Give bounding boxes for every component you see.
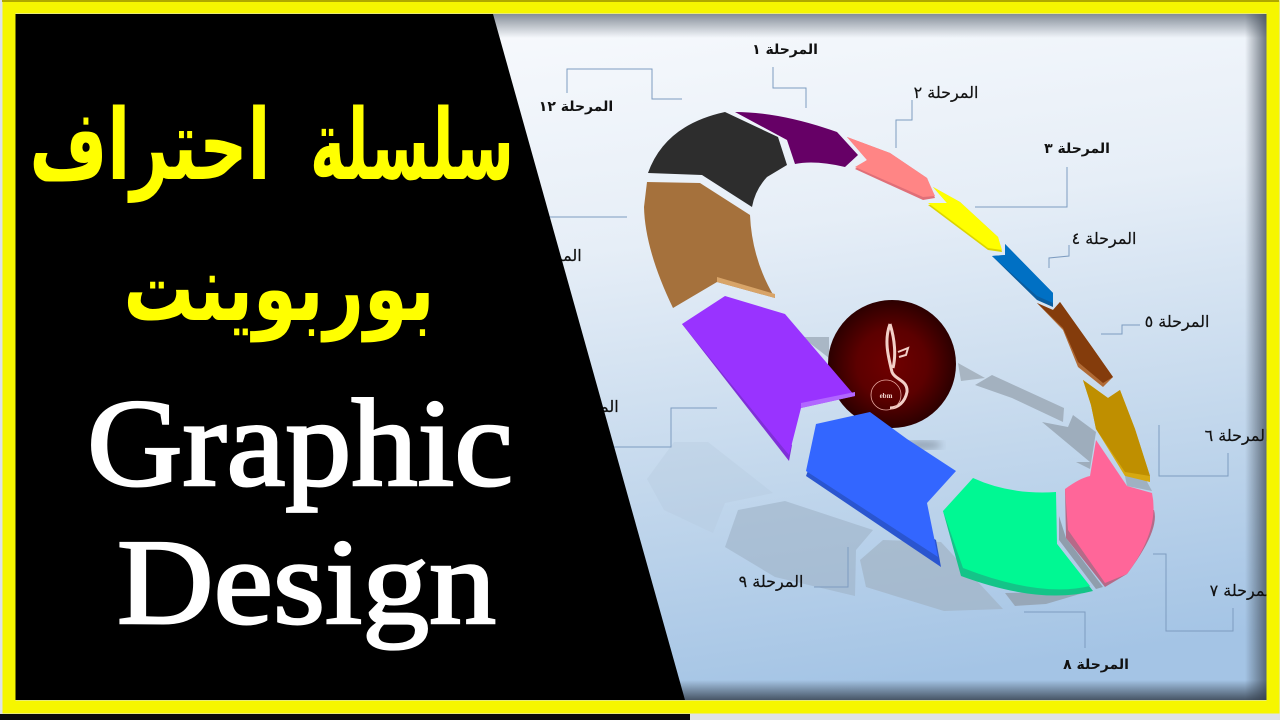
segment 6: gold [1083, 380, 1150, 482]
stage labels: المرحلة ١٢ [539, 99, 613, 115]
stage labels: المرحلة ١ [752, 42, 818, 58]
centre ball logo [828, 300, 956, 449]
segment 2: salmon [847, 137, 935, 200]
stage labels: المرحلة ٣ [1044, 141, 1110, 157]
stage labels [508, 42, 1274, 673]
segment 12: charcoal [648, 112, 787, 207]
floor shadow of the ring [647, 337, 1152, 611]
segment 8: green [943, 478, 1093, 596]
segment 10: violet [682, 296, 855, 461]
ring of twelve arrow segments [644, 112, 1155, 596]
stage labels: المرحلة ٥ [1145, 312, 1209, 332]
centre ball logo: ebm [880, 392, 893, 400]
segment 9: royal blue [806, 412, 956, 567]
title: english white: Design [117, 515, 496, 650]
stage labels: المرحلة ١١ [508, 246, 582, 266]
stage labels: المرحلة ٢ [914, 83, 978, 103]
segment 4: blue [992, 244, 1053, 307]
stage labels: المرحلة ١٠ [545, 397, 619, 417]
segment 3: yellow [928, 187, 1002, 252]
stage labels: المرحلة ٦ [1205, 426, 1269, 446]
segment 5: brown [1037, 302, 1113, 387]
title: arabic yellow: سلسلة [310, 89, 514, 203]
stage labels: المرحلة ٨ [1063, 657, 1129, 673]
stage labels: المرحلة ٩ [739, 572, 803, 592]
segment 11: tan [644, 182, 775, 308]
title: arabic yellow: احتراف [30, 89, 270, 203]
connector lines [540, 67, 1233, 648]
black title panel [15, 14, 685, 700]
title: arabic yellow: بوربوينت [124, 235, 434, 343]
stage labels: المرحلة ٧ [1210, 581, 1274, 601]
title: arabic yellow [30, 89, 514, 343]
segment 7: pink [1065, 440, 1155, 587]
stage labels: المرحلة ٤ [1072, 229, 1136, 249]
title: english white [87, 375, 513, 650]
title: english white: Graphic [87, 375, 513, 513]
segment 1: dark purple [735, 112, 858, 167]
